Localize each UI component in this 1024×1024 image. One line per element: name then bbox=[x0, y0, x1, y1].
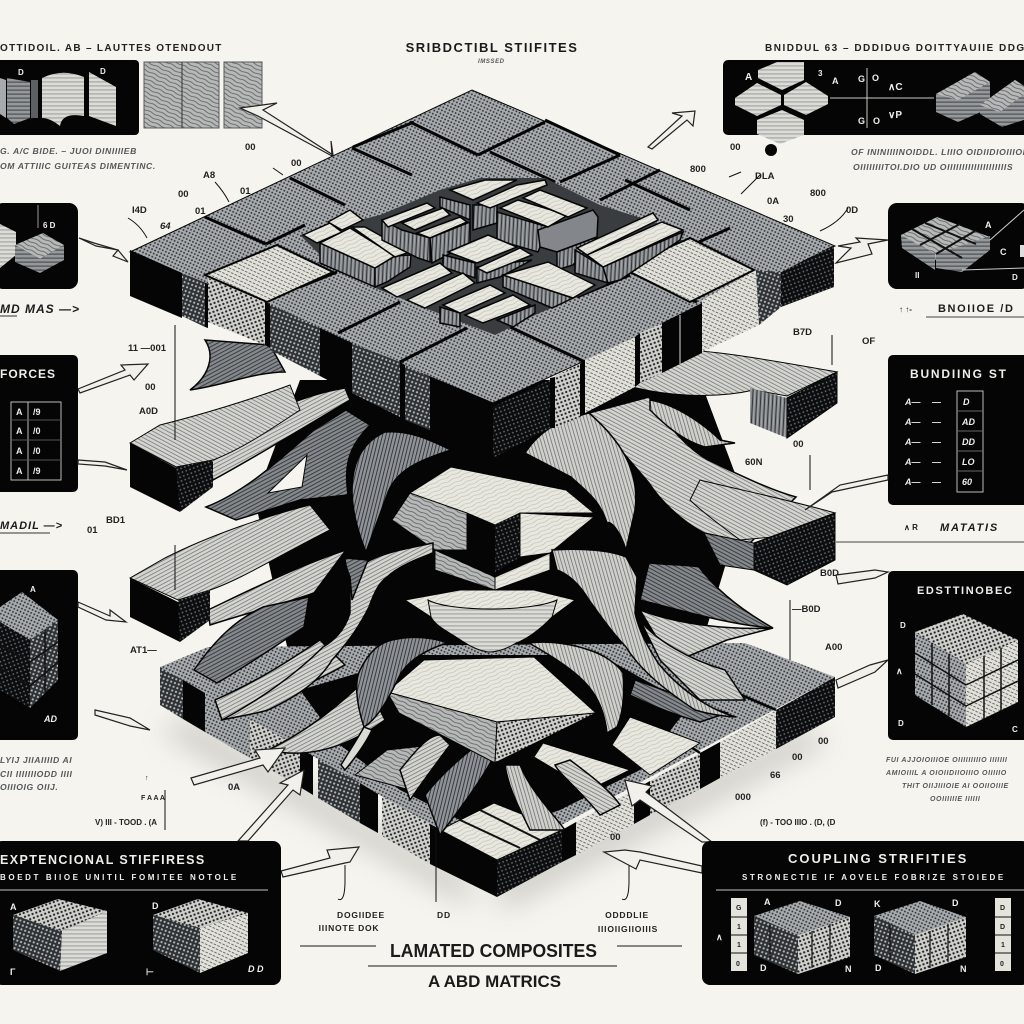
callout labels around the stack: A0D bbox=[139, 406, 158, 417]
fibres: lower strands bbox=[194, 550, 773, 835]
block: left upper bbox=[130, 385, 300, 512]
panel: extensional stiffness: D bbox=[152, 901, 159, 911]
panel: top right bending: OIIIIIIIITOI.DIO UD OIIIIIIIIIIIIIIIIIIIIS bbox=[853, 162, 1013, 172]
arrow: top left panel to slab bbox=[240, 103, 333, 156]
callout labels around the stack: 0D bbox=[846, 205, 858, 216]
callout labels around the stack: ↑ bbox=[145, 775, 148, 782]
panel: right bending stiffness table: A— bbox=[904, 417, 921, 427]
callout labels around the stack: 00 bbox=[291, 158, 302, 169]
panel: left forces: A bbox=[16, 407, 23, 417]
panel: coupling stiffness: D bbox=[875, 963, 882, 973]
arrow: top right panel to slab bbox=[648, 111, 695, 149]
panel: left forces: /0 bbox=[33, 426, 41, 436]
panel: top left extensional laminate: G. A/C BIDE. – JUOI DINIIIIEB bbox=[0, 146, 137, 156]
panel: left forces: A bbox=[16, 426, 23, 436]
panel: extensional stiffness: EXPTENCIONAL STIFFIRESS bbox=[0, 853, 206, 867]
panel: left cube bbox=[0, 570, 78, 792]
callout labels around the stack bbox=[87, 142, 875, 843]
arrow: forces to block bbox=[78, 364, 148, 393]
panel: coupling stiffness bbox=[702, 841, 1024, 985]
panel: right cube: D bbox=[900, 621, 906, 630]
fibres: centre ribbons bbox=[222, 543, 736, 720]
central dark core behind fibres bbox=[255, 380, 745, 760]
callout labels around the stack: 66 bbox=[770, 770, 781, 781]
upper slab bbox=[130, 90, 835, 458]
panel: top right bending: ∨P bbox=[888, 110, 902, 121]
callout labels around the stack: DLA bbox=[755, 171, 775, 182]
panel: right bending stiffness table: LO bbox=[962, 457, 974, 467]
panel: right cube: D bbox=[898, 719, 904, 728]
panel: top left extensional laminate: OM ATTIIIC GUITEAS DIMENTINC. bbox=[0, 161, 156, 171]
panel: top right bending: G bbox=[858, 74, 865, 84]
panel: coupling stiffness: D bbox=[952, 898, 959, 908]
panel: right cube: EDSTTINOBEC bbox=[917, 585, 1013, 597]
block: left lower bbox=[130, 505, 330, 642]
panel: coupling stiffness: 1 bbox=[737, 924, 741, 931]
panel: coupling stiffness: G bbox=[736, 905, 742, 912]
callout labels around the stack: AT1— bbox=[130, 645, 157, 656]
panel: top right bending: G bbox=[858, 116, 865, 126]
panel: right block grid: ↑ ↑- bbox=[899, 305, 912, 314]
front faces of the upper slab bbox=[130, 250, 182, 318]
title bbox=[300, 941, 682, 991]
fibres: upper strands bbox=[190, 340, 796, 552]
dark well and wood strips under the lower block bbox=[300, 655, 690, 835]
lower slab bbox=[160, 643, 835, 897]
title: LAMATED COMPOSITES bbox=[390, 941, 597, 961]
bottom sub captions: DD bbox=[437, 910, 451, 920]
wood block: middle bbox=[392, 467, 594, 590]
callout labels around the stack: 00 bbox=[178, 189, 189, 200]
wood blocks bbox=[303, 180, 683, 327]
callout labels around the stack: 00 bbox=[245, 142, 256, 153]
panel: left bending cubes: MD MAS —> bbox=[0, 302, 80, 316]
panel: top right bending: OF ININIIIINOIDDL. LIIIO OIDIIDIOIIIOI bbox=[851, 147, 1024, 157]
panel: top right bending: ∧C bbox=[888, 82, 903, 93]
panel: right bending stiffness table: — bbox=[931, 397, 942, 407]
panel: coupling stiffness: ∧ bbox=[716, 932, 723, 942]
panel: right bending stiffness table: — bbox=[931, 477, 942, 487]
callout labels around the stack: I4D bbox=[132, 205, 147, 216]
panel: coupling stiffness: 1 bbox=[737, 942, 741, 949]
panel: coupling stiffness: 1 bbox=[1001, 942, 1005, 949]
panel: top left extensional laminate bbox=[0, 43, 262, 171]
panel: top right bending bbox=[723, 43, 1024, 172]
panel: right bending stiffness table: MATATIS bbox=[940, 522, 999, 534]
panel: left forces: A bbox=[16, 466, 23, 476]
panel: top right bending: A bbox=[745, 72, 752, 83]
panel: top right bending: 3 bbox=[818, 69, 823, 78]
soft shadows under the lower slab bbox=[160, 720, 830, 910]
panel: right block grid: D bbox=[1012, 273, 1018, 282]
arrow: left panel to slab bbox=[79, 238, 128, 262]
callout labels around the stack: 800 bbox=[690, 164, 706, 175]
panel: extensional stiffness: A bbox=[10, 902, 17, 912]
panel: top right bending: BNIDDUL 63 – DDDIDUG DOITTYAUIIE DDGI bbox=[765, 43, 1024, 54]
panel: left forces: /0 bbox=[33, 446, 41, 456]
panel: left forces: A bbox=[16, 446, 23, 456]
panel: top left extensional laminate: OTTIDOIL. AB – LAUTTES OTENDOUT bbox=[0, 43, 223, 54]
panel: right bending stiffness table: BUNDIING ST bbox=[910, 367, 1008, 381]
callout labels around the stack: 60N bbox=[745, 457, 763, 468]
callout labels around the stack: A8 bbox=[203, 170, 215, 181]
panel: right bending stiffness table: AD bbox=[961, 417, 975, 427]
panel: left forces: MADIL —> bbox=[0, 520, 63, 532]
panel: coupling stiffness: COUPLING STRIFITIES bbox=[788, 851, 968, 866]
panel: extensional stiffness: D D bbox=[248, 964, 264, 974]
panel: right bending stiffness table bbox=[836, 355, 1024, 542]
panel: top right bending: O bbox=[873, 116, 880, 126]
callout labels around the stack: 800 bbox=[810, 188, 826, 199]
panel: left cube: CII IIIIIIIODD IIII bbox=[0, 769, 73, 779]
panel: right bending stiffness table: A— bbox=[904, 457, 921, 467]
panel: left forces: FORCES bbox=[0, 367, 56, 381]
panel: left cube: OIIIOIG OIIJ. bbox=[0, 782, 58, 792]
fibres: lower loops bbox=[357, 637, 624, 733]
black seams on the upper slab face bbox=[205, 120, 730, 362]
heading: top centre: SRIBDCTIBL STIIFITES bbox=[406, 40, 578, 55]
callout labels around the stack: 00 bbox=[792, 752, 803, 763]
panel: right cube: AMIOIIIL A OIOIIDIIOIIIO OIIIIIO bbox=[885, 770, 1007, 777]
panel: left forces: /9 bbox=[33, 466, 41, 476]
bottom sub captions: IIINOTE DOK bbox=[319, 923, 379, 933]
callout labels around the stack: 11 —001 bbox=[128, 343, 167, 354]
arrow: right panel to slab bbox=[836, 238, 888, 263]
panel: right bending stiffness table: A— bbox=[904, 397, 921, 407]
panel: right cube: ∧ bbox=[896, 666, 903, 676]
panel: right bending stiffness table: D bbox=[963, 397, 970, 407]
panel: right bending stiffness table: — bbox=[931, 457, 942, 467]
title: A ABD MATRICS bbox=[428, 972, 561, 991]
callout labels around the stack: A00 bbox=[825, 642, 842, 653]
callout leaders bbox=[128, 168, 848, 902]
panel: right bending stiffness table: — bbox=[931, 437, 942, 447]
heading: top centre bbox=[406, 40, 578, 65]
panel: right cube: C bbox=[1012, 725, 1018, 734]
arrows into lower slab bbox=[78, 460, 888, 877]
panel: top right bending: O bbox=[872, 73, 879, 83]
callout labels around the stack: 64 bbox=[160, 221, 171, 232]
callout labels around the stack: B7D bbox=[793, 327, 812, 338]
panel: left cube: AD bbox=[43, 714, 57, 724]
panel: extensional stiffness: ⊢ bbox=[146, 967, 154, 977]
wood block: lower bbox=[387, 657, 596, 763]
callout labels around the stack: 00 bbox=[730, 142, 741, 153]
callout labels around the stack: 01 bbox=[87, 525, 98, 536]
callout labels around the stack: 01 bbox=[195, 206, 206, 217]
panel: left cube: LYIJ JIIAIIIID AI bbox=[0, 755, 72, 765]
panel: coupling stiffness: D bbox=[1000, 924, 1005, 931]
callout labels around the stack: OF bbox=[862, 336, 875, 347]
panel: coupling stiffness: D bbox=[1000, 905, 1005, 912]
panel: left forces: /9 bbox=[33, 407, 41, 417]
lens shaped block bbox=[405, 590, 575, 652]
bottom sub captions: IIIOIIGIIOIIIS bbox=[598, 924, 658, 934]
callout labels around the stack: —B0D bbox=[792, 604, 821, 615]
panel: coupling stiffness: D bbox=[760, 963, 767, 973]
bottom sub captions bbox=[319, 910, 658, 934]
callout labels around the stack: 0A bbox=[228, 782, 240, 793]
panel: left bending cubes bbox=[0, 203, 80, 316]
panel: extensional stiffness: Γ bbox=[10, 967, 16, 977]
panel: right cube bbox=[885, 571, 1024, 803]
callout labels around the stack: 01 bbox=[240, 186, 251, 197]
bottom sub captions: ODDDLIE bbox=[605, 910, 649, 920]
callout labels around the stack: 000 bbox=[735, 792, 751, 803]
panel: right bending stiffness table: A— bbox=[904, 437, 921, 447]
panel: right cube: FUI AJJOIOIIIOE OIIIIIIIIIO IIIIIII bbox=[886, 757, 1008, 764]
panel: coupling stiffness: A bbox=[764, 897, 771, 907]
callout labels around the stack: (f) - TOO IIIO . (D, (D bbox=[760, 818, 836, 827]
panel: right block grid: BNOIIOE /D bbox=[938, 303, 1015, 315]
callout labels around the stack: V) III - TOOD . (A bbox=[95, 818, 157, 827]
panel: coupling stiffness: STRONECTIE IF AOVELE FOBRIZE STOIEDE bbox=[742, 873, 1006, 882]
panel: right block grid bbox=[888, 203, 1024, 317]
panel: right bending stiffness table: 60 bbox=[962, 477, 972, 487]
panel: top left extensional laminate: D bbox=[18, 68, 24, 77]
callout labels around the stack: 00 bbox=[818, 736, 829, 747]
white gap with eye bbox=[268, 455, 307, 493]
wood centre of slab bbox=[300, 178, 685, 335]
panel: left cube: A bbox=[30, 585, 36, 594]
panel: left bending cubes: 6 D bbox=[43, 221, 56, 230]
panel: extensional stiffness: BOEDT BIIOE UNITIL FOMITEE NOTOLE bbox=[0, 873, 239, 882]
callout labels around the stack: F A A A bbox=[141, 795, 165, 802]
panel: extensional stiffness bbox=[0, 841, 281, 985]
panel: right bending stiffness table: ∧ R bbox=[904, 523, 918, 532]
heading: top centre: IMSSED bbox=[478, 59, 505, 65]
panel: coupling stiffness: 0 bbox=[736, 961, 740, 968]
panel: right bending stiffness table: — bbox=[931, 417, 942, 427]
panel: coupling stiffness: K bbox=[874, 899, 881, 909]
panel: top left extensional laminate: D bbox=[100, 67, 106, 76]
callout labels around the stack: 00 bbox=[145, 382, 156, 393]
panel: right block grid: II bbox=[915, 271, 919, 280]
panel: right block grid: C bbox=[1000, 247, 1007, 257]
panel: right cube: THIT OIIJIIIOIE AI OOIIOIIIE bbox=[902, 783, 1009, 790]
panel: right cube: OOIIIIIIE IIIIII bbox=[930, 796, 981, 803]
panel: left forces bbox=[0, 355, 78, 533]
panel: top right bending: A bbox=[832, 76, 839, 86]
block: right lower bbox=[690, 480, 835, 585]
panel: right bending stiffness table: A— bbox=[904, 477, 921, 487]
panel: coupling stiffness: 0 bbox=[1000, 961, 1004, 968]
bottom sub captions: DOGIIDEE bbox=[337, 910, 385, 920]
callout labels around the stack: 0A bbox=[767, 196, 779, 207]
callout labels around the stack: B0D bbox=[820, 568, 839, 579]
callout labels around the stack: 00 bbox=[610, 832, 621, 843]
block: right upper bbox=[625, 349, 837, 438]
callout labels around the stack: BD1 bbox=[106, 515, 126, 526]
panel: right bending stiffness table: DD bbox=[962, 437, 975, 447]
callout labels around the stack: 00 bbox=[793, 439, 804, 450]
panel: right block grid: A bbox=[985, 220, 992, 230]
panel: coupling stiffness: D bbox=[835, 898, 842, 908]
callout labels around the stack: 30 bbox=[783, 214, 794, 225]
panel: coupling stiffness: N bbox=[845, 964, 852, 974]
panel: coupling stiffness: N bbox=[960, 964, 966, 974]
